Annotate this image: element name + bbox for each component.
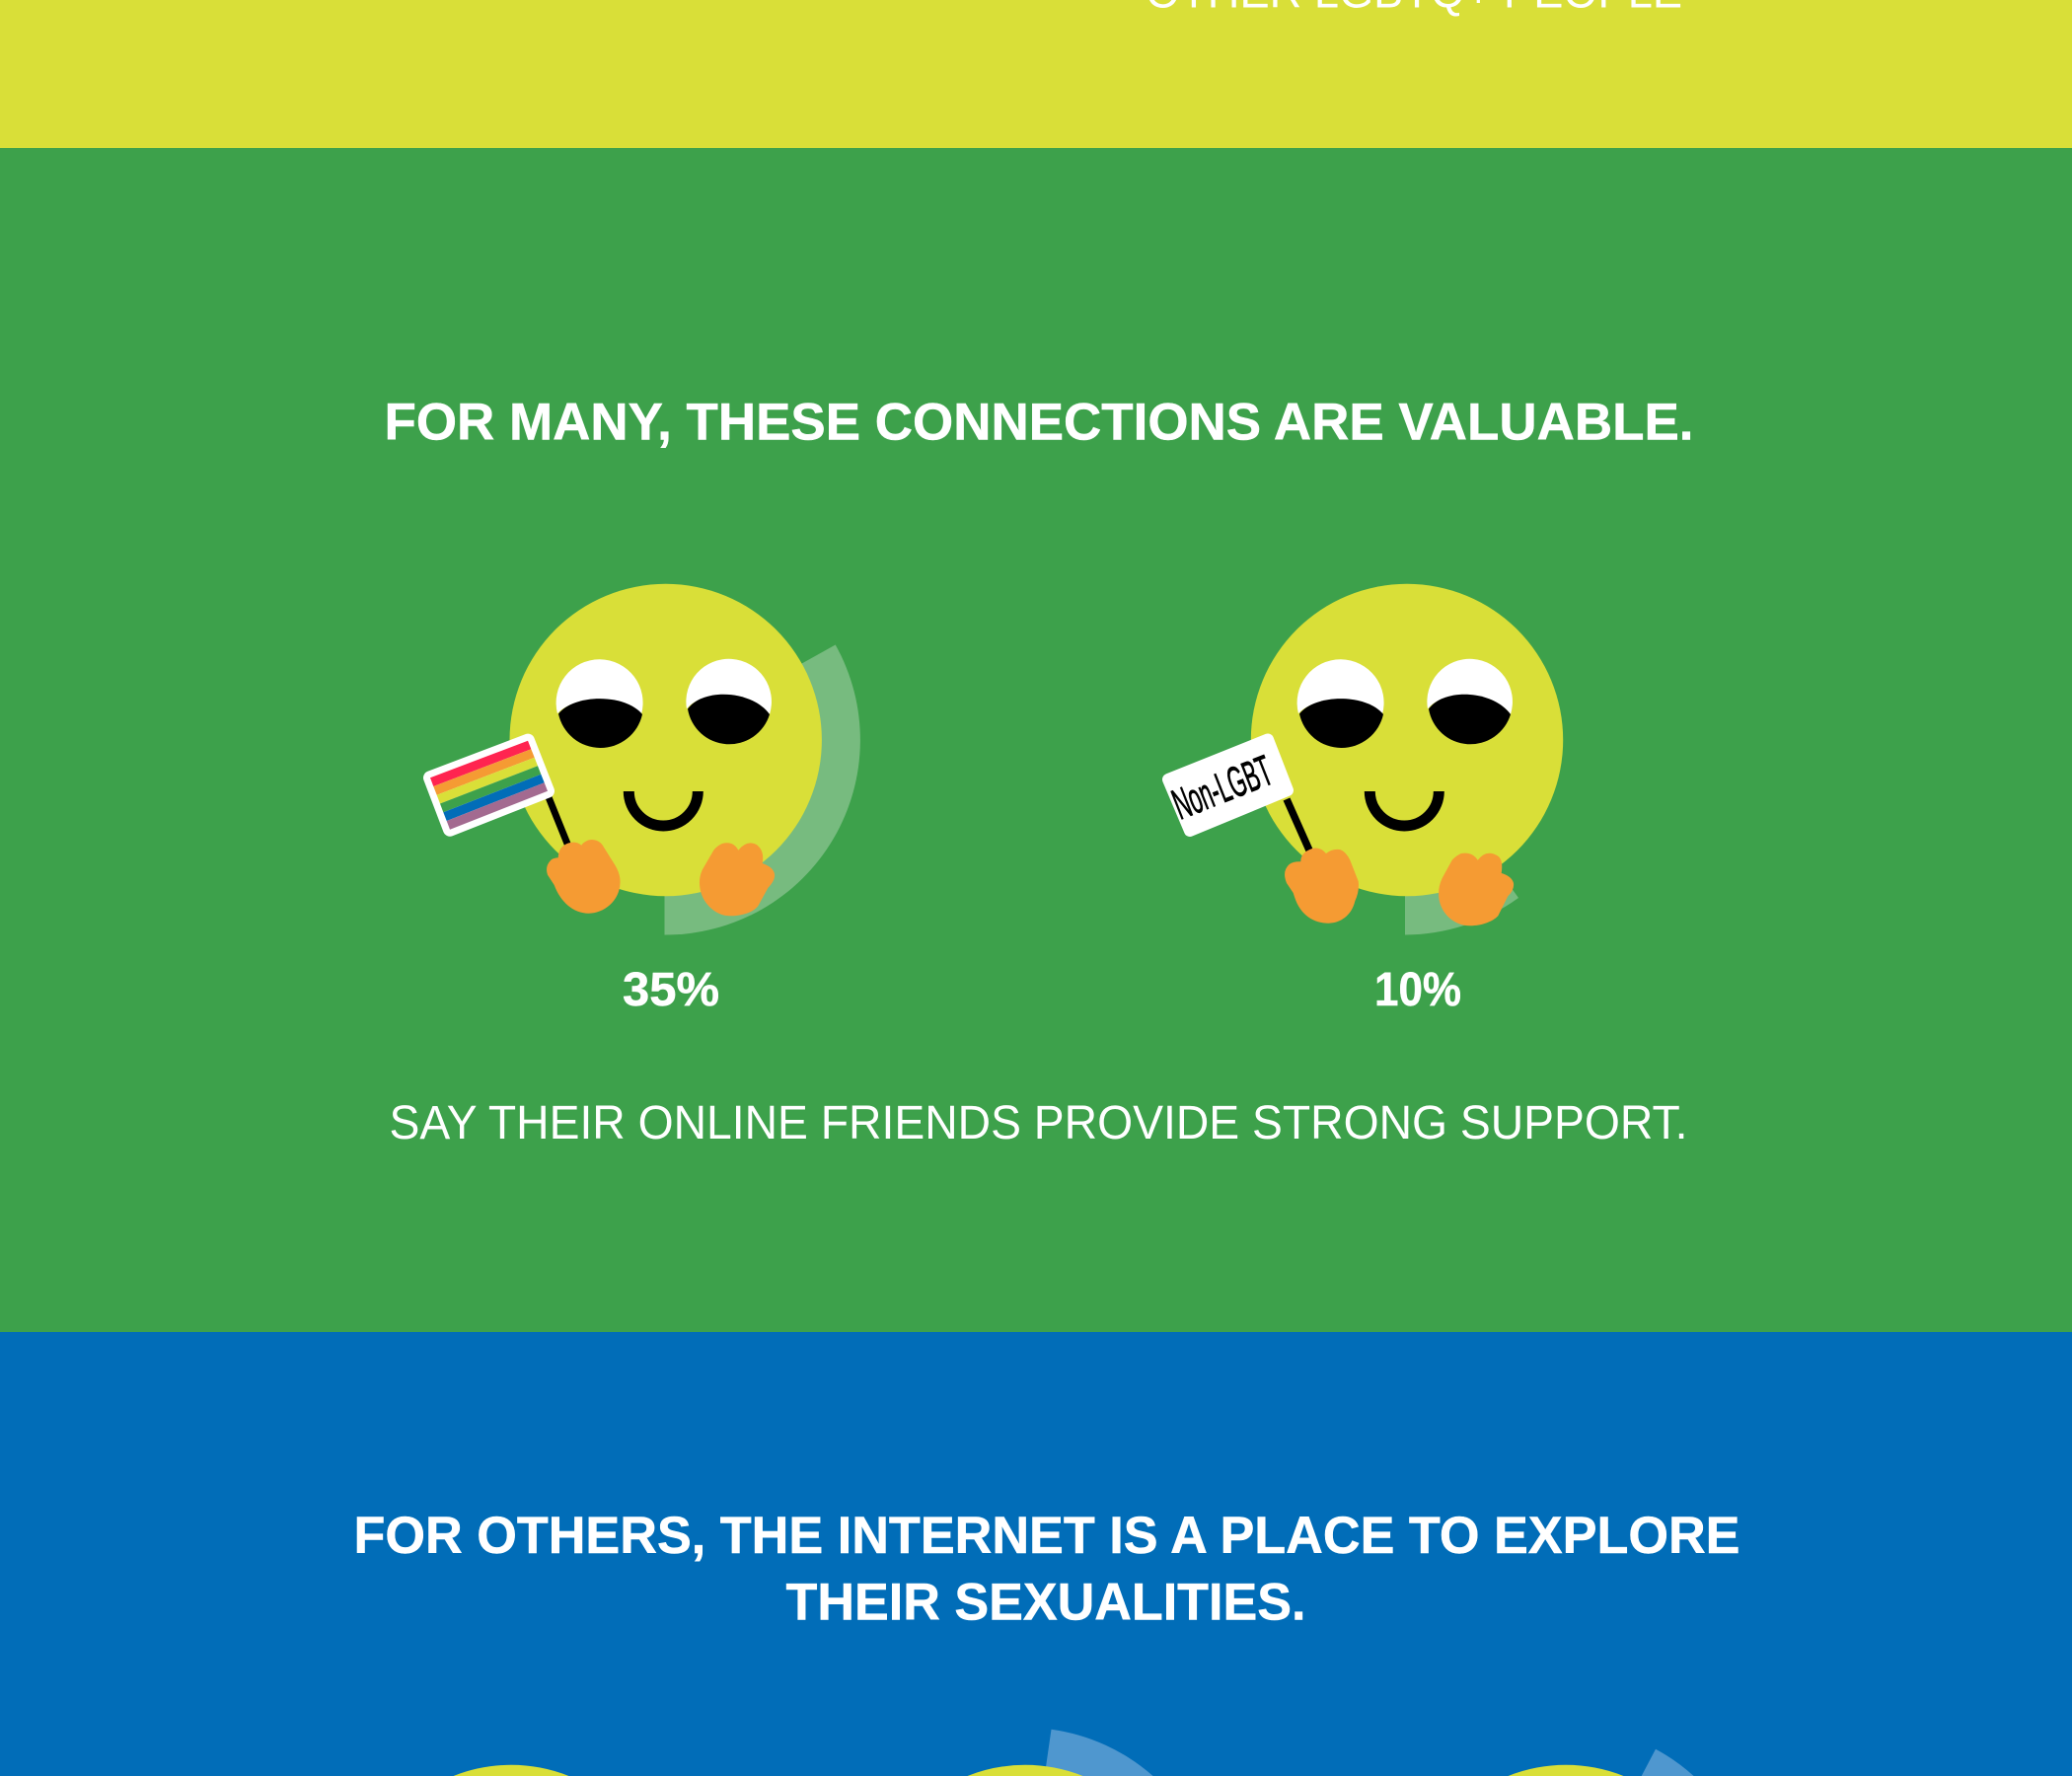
sign text: Non-LGBT (1166, 747, 1279, 829)
face (509, 584, 822, 896)
rainbow flag (430, 741, 548, 830)
flag pole (549, 797, 569, 849)
face (1251, 584, 1563, 896)
right hand (1439, 853, 1514, 925)
caption: online friends support: SAY THEIR ONLINE FRIENDS PROVIDE STRONG SUPPORT. (389, 1097, 1687, 1149)
left hand (1285, 849, 1359, 924)
panel: yellow top band (0, 0, 2072, 148)
smile (1369, 791, 1439, 826)
left eye (556, 659, 643, 748)
chart: 35% radial wedge (665, 645, 860, 935)
heading: explore their sexualities: THEIR SEXUALITIES. (785, 1574, 1306, 1632)
left hand (547, 840, 621, 914)
figure: second emoji with wedge, cropped (967, 1730, 1153, 1776)
value: 35%: 35% (623, 964, 719, 1016)
figure: first emoji, cropped (454, 1765, 568, 1776)
right eye (1427, 659, 1513, 744)
heading: explore their sexualities (353, 1507, 1740, 1632)
right eye (686, 659, 772, 744)
figure: LGBTQ+ emoji with rainbow flag, 35% (430, 584, 860, 1016)
heading: connections are valuable: FOR MANY, THESE CONNECTIONS ARE VALUABLE. (385, 394, 1693, 452)
panel: green connections (0, 148, 2072, 1332)
left eye (1297, 659, 1384, 748)
sign pole (1287, 799, 1310, 852)
figure: non-LGBT emoji with sign, 10% (1166, 584, 1563, 1016)
figure: third emoji with wedge, cropped (1508, 1749, 1694, 1776)
sign (1166, 740, 1288, 831)
heading: explore their sexualities: FOR OTHERS, THE INTERNET IS A PLACE TO EXPLORE (353, 1507, 1740, 1565)
chart: 10% radial wedge (1405, 740, 1518, 935)
panel: blue explore sexualities (0, 1332, 2072, 1776)
smile (629, 791, 698, 826)
value: 10%: 10% (1374, 964, 1461, 1016)
right hand (700, 843, 775, 916)
